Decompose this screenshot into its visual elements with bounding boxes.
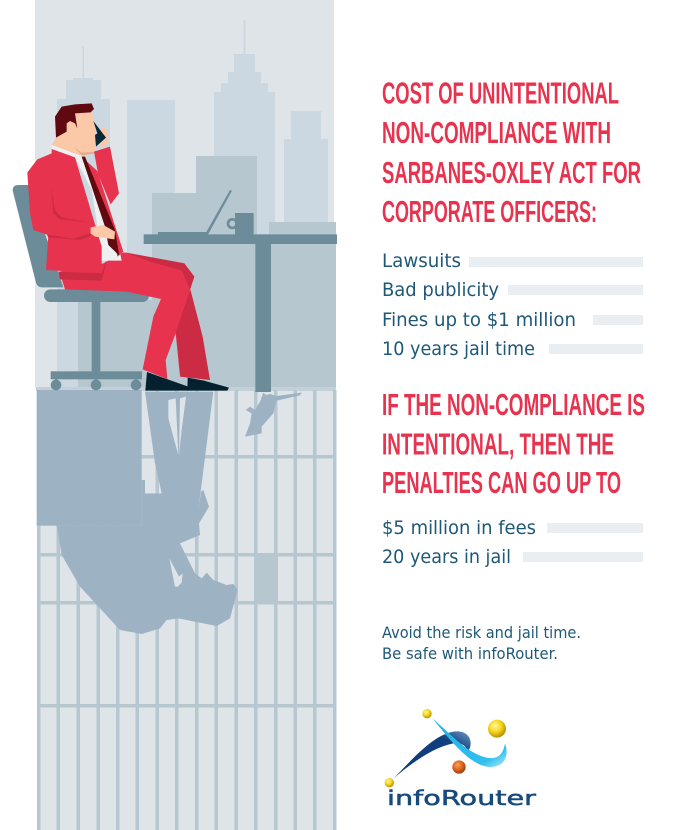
shoes [145,372,229,391]
item: bad publicity: Bad publicity [382,279,499,301]
hair [55,103,94,138]
calling hand [100,126,109,148]
panel: jail bars and floor [36,387,336,830]
logo wordmark: infoRouter [387,786,537,810]
trousers [59,252,210,380]
logo: infoRouter [385,709,537,810]
item: bad publicity [382,279,643,301]
item: years in jail: 20 years in jail [382,546,511,568]
item: fees [382,517,643,539]
item: jail time: 10 years jail time [382,338,535,360]
item: lawsuits: Lawsuits [382,250,461,272]
head and neck [52,112,95,157]
office furniture [13,185,337,392]
chair [13,185,149,390]
closing text [382,623,581,663]
panel: office scene [35,0,336,388]
businessman in red suit [27,103,229,391]
heading: unintentional cost [382,76,641,229]
heading: intentional penalties [382,387,645,500]
list: intentional penalties [382,517,643,568]
closing text: Avoid the risk and jail time. [382,623,581,642]
item: lawsuits [382,250,643,272]
desk [144,234,337,392]
raised sleeve [94,147,119,204]
skyline buildings [57,20,328,388]
item: jail time [382,338,643,360]
jacket [27,149,102,273]
shadow: man silhouette and chair reflection [37,390,238,634]
item: fees: $5 million in fees [382,517,536,539]
list: unintentional penalties [382,250,643,360]
item: fines: Fines up to $1 million [382,309,576,331]
shadow: rat [245,393,302,437]
tie [82,157,119,256]
phone [93,121,106,147]
jacket hem shadow [58,262,107,281]
closing text: Be safe with infoRouter. [382,644,558,663]
shirt [52,145,122,261]
item: years in jail [382,546,643,568]
hand [91,225,115,239]
laptop [158,190,232,235]
foreground buildings [78,156,336,388]
jacket folds [51,187,90,223]
logo mark [385,709,507,787]
coffee mug [228,213,254,235]
